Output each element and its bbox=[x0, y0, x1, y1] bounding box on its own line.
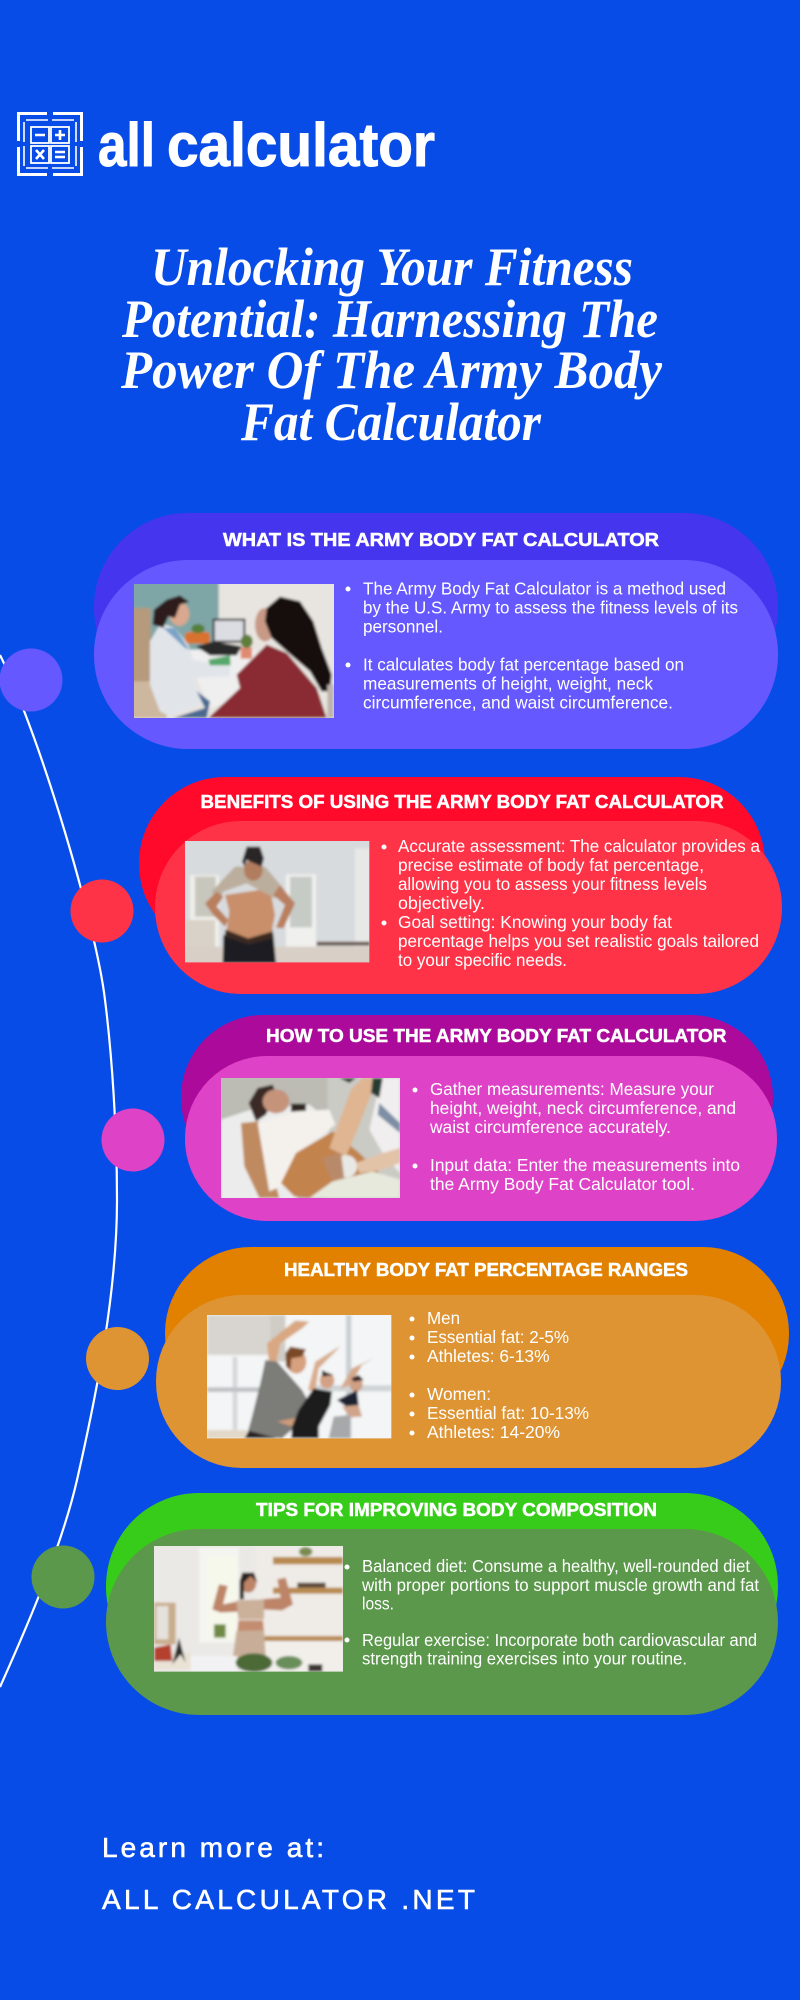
website: ALL CALCULATOR .NET bbox=[102, 1884, 475, 1915]
panel: healthy ranges bbox=[86, 1247, 789, 1468]
timeline dot 4 bbox=[86, 1327, 149, 1390]
text block: waist circumference accurately. bbox=[429, 1117, 671, 1137]
heading: HOW TO USE THE ARMY BODY FAT CALCULATOR bbox=[266, 1026, 726, 1046]
text block: Athletes: 6-13% bbox=[427, 1346, 550, 1366]
text block: Women: bbox=[427, 1384, 491, 1404]
timeline dot 1 bbox=[0, 648, 62, 712]
text block: Athletes: 14-20% bbox=[427, 1422, 560, 1442]
heading: HEALTHY BODY FAT PERCENTAGE RANGES bbox=[284, 1260, 688, 1280]
panel: how to use bbox=[102, 1015, 777, 1221]
text block: Accurate assessment: The calculator provides a bbox=[398, 836, 760, 856]
heading: BENEFITS OF USING THE ARMY BODY FAT CALCULATOR bbox=[200, 792, 724, 812]
text block: personnel. bbox=[363, 616, 443, 636]
panel 5 back pill bbox=[106, 1493, 778, 1680]
title bbox=[120, 237, 663, 452]
text block: with proper portions to support muscle growth and fat bbox=[361, 1575, 759, 1595]
text block: Goal setting: Knowing your body fat bbox=[398, 912, 672, 932]
title: Unlocking Your Fitness bbox=[151, 237, 633, 297]
text block: Men bbox=[427, 1308, 460, 1328]
logo wordmark: all bbox=[98, 111, 155, 179]
photo: doctor and patient bbox=[134, 584, 334, 718]
text block: Regular exercise: Incorporate both cardiovascular and bbox=[362, 1630, 757, 1650]
text block: by the U.S. Army to assess the fitness levels of its bbox=[363, 598, 738, 618]
heading: WHAT IS THE ARMY BODY FAT CALCULATOR bbox=[223, 530, 659, 550]
text block: It calculates body fat percentage based on bbox=[363, 654, 684, 674]
text block: Essential fat: 10-13% bbox=[427, 1403, 589, 1423]
text block bbox=[410, 1308, 589, 1442]
text block: measurements of height, weight, neck bbox=[363, 674, 653, 694]
panel 4 front pill bbox=[156, 1295, 781, 1468]
logo bbox=[18, 111, 435, 179]
text block: precise estimate of body fat percentage, bbox=[398, 855, 704, 875]
text block: Balanced diet: Consume a healthy, well-rounded diet bbox=[362, 1556, 750, 1576]
title: Power Of The Army Body bbox=[120, 340, 663, 400]
text block: Input data: Enter the measurements into bbox=[430, 1155, 740, 1175]
photo: man checking his waist bbox=[185, 841, 370, 962]
bullet markers bbox=[382, 844, 386, 926]
panel 5 front pill bbox=[106, 1529, 778, 1715]
text block: Gather measurements: Measure your bbox=[430, 1079, 714, 1099]
panel 1 back pill bbox=[94, 513, 778, 702]
text block bbox=[346, 578, 738, 712]
photo: woman flexing in kitchen bbox=[154, 1546, 343, 1672]
panel 4 back pill bbox=[165, 1247, 789, 1420]
panel 2 back pill bbox=[139, 777, 765, 950]
photo: body treatment bbox=[221, 1078, 400, 1198]
text block bbox=[344, 1556, 759, 1668]
icon: calculator bbox=[18, 114, 82, 174]
panel: benefits bbox=[70, 777, 782, 994]
panel: what is the army body fat calculator bbox=[0, 513, 778, 749]
text block: loss. bbox=[362, 1594, 394, 1614]
bullet markers bbox=[346, 586, 350, 668]
title: Fat Calculator bbox=[240, 392, 542, 452]
text block: objectively. bbox=[398, 893, 485, 913]
timeline curve bbox=[0, 655, 117, 1687]
text block bbox=[412, 1079, 740, 1194]
panel 2 front pill bbox=[155, 821, 782, 994]
bullet markers bbox=[344, 1564, 350, 1642]
text block: The Army Body Fat Calculator is a method used bbox=[363, 578, 726, 598]
photo: group stretching bbox=[207, 1315, 392, 1438]
logo wordmark: calculator bbox=[167, 111, 435, 179]
text block: Essential fat: 2-5% bbox=[427, 1327, 569, 1347]
text block: height, weight, neck circumference, and bbox=[430, 1098, 736, 1118]
bullet markers bbox=[412, 1088, 418, 1168]
text block: circumference, and waist circumference. bbox=[363, 692, 673, 712]
text block: percentage helps you set realistic goals tailored bbox=[398, 931, 759, 951]
panel: tips bbox=[32, 1493, 778, 1715]
text block: strength training exercises into your routine. bbox=[362, 1648, 687, 1668]
timeline dot 3 bbox=[102, 1108, 164, 1172]
panel 3 front pill bbox=[185, 1056, 777, 1221]
footer call to action bbox=[102, 1832, 475, 1915]
text block: allowing you to assess your fitness levels bbox=[398, 874, 707, 894]
text block: the Army Body Fat Calculator tool. bbox=[430, 1174, 695, 1194]
title: Potential: Harnessing The bbox=[121, 289, 658, 349]
timeline dot 5 bbox=[32, 1546, 94, 1608]
panel 1 front pill bbox=[94, 560, 778, 749]
bullet markers bbox=[410, 1316, 414, 1436]
text block: to your specific needs. bbox=[398, 950, 567, 970]
timeline dot 2 bbox=[70, 880, 134, 942]
text block bbox=[382, 836, 760, 970]
heading: TIPS FOR IMPROVING BODY COMPOSITION bbox=[256, 1500, 657, 1520]
learn more label: Learn more at: bbox=[102, 1832, 324, 1863]
panel 3 back pill bbox=[181, 1015, 773, 1180]
